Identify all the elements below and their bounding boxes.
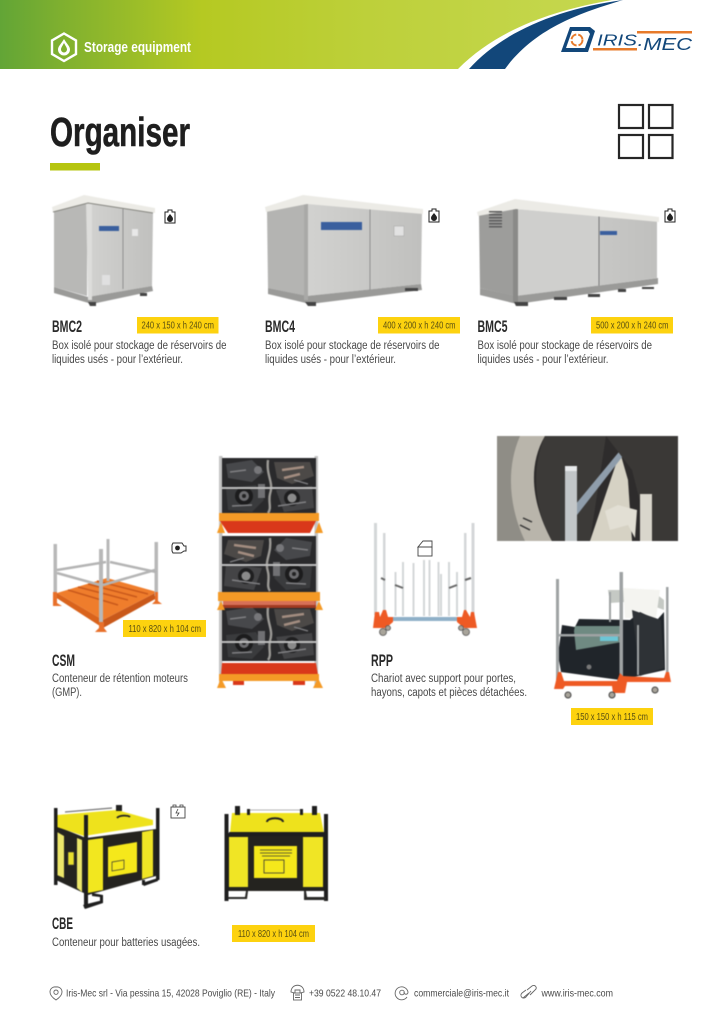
RPP empty trolley photo <box>373 523 477 636</box>
phone: +39 0522 48.10.47 <box>309 988 381 1000</box>
title: Organiser <box>50 109 190 155</box>
RPP name: RPP <box>371 652 393 670</box>
BMC4 size tag: 400 x 200 x h 240 cm <box>383 320 456 332</box>
RPP description: Chariot avec support pour portes, <box>371 673 516 685</box>
BMC4 description: Box isolé pour stockage de réservoirs de <box>265 340 440 352</box>
swoosh <box>469 0 623 69</box>
product: BMC4 <box>265 195 460 366</box>
BMC4 description: liquides usés - pour l’extérieur. <box>265 354 396 366</box>
product: CBE <box>52 805 328 949</box>
header banner <box>0 0 623 69</box>
header icon: hexagon drop <box>52 34 76 61</box>
BMC2 size tag: 240 x 150 x h 240 cm <box>142 320 214 332</box>
CSM description: (GMP). <box>52 687 82 699</box>
BMC5 photo <box>477 199 659 306</box>
icon: at sign <box>395 987 408 1000</box>
CBE angled container photo <box>54 805 160 909</box>
icon: battery <box>171 805 185 818</box>
product: CSM <box>52 456 323 699</box>
logo: ·MEC <box>636 34 692 54</box>
icon: oil canister <box>165 210 175 223</box>
RPP size tag: 150 x 150 x h 115 cm <box>576 712 648 723</box>
footer <box>50 985 613 1000</box>
CSM size tag <box>123 620 206 637</box>
icon: location pin <box>50 987 62 1000</box>
product: BMC5 <box>477 199 675 366</box>
icon: oil canister <box>665 209 675 222</box>
CSM empty pallet photo <box>53 539 162 632</box>
icon: car door <box>418 541 432 556</box>
BMC5 size tag <box>591 317 673 334</box>
website: www.iris-mec.com <box>541 988 613 1000</box>
CSM description: Conteneur de rétention moteurs <box>52 673 188 685</box>
BMC4 photo <box>265 195 423 306</box>
icon: oil canister <box>429 209 439 222</box>
RPP loaded trolley photo <box>554 572 671 698</box>
header label: Storage equipment <box>84 39 191 56</box>
BMC2 photo <box>52 195 155 306</box>
logo: IRIS <box>597 32 638 50</box>
product: BMC2 <box>52 195 226 366</box>
icon: four-square grid <box>619 105 672 158</box>
BMC2 description: liquides usés - pour l’extérieur. <box>52 354 183 366</box>
icon: engine <box>172 543 186 553</box>
BMC2 name: BMC2 <box>52 318 82 336</box>
RPP size tag <box>571 708 653 725</box>
BMC5 size tag: 500 x 200 x h 240 cm <box>596 320 668 332</box>
CSM name: CSM <box>52 652 75 670</box>
CBE front container photo <box>224 806 328 901</box>
CBE description: Conteneur pour batteries usagées. <box>52 937 200 949</box>
CSM size tag: 110 x 820 x h 104 cm <box>128 624 201 635</box>
BMC5 description: Box isolé pour stockage de réservoirs de <box>478 340 652 352</box>
icon: telephone <box>291 985 304 1000</box>
icon: chain link <box>521 985 536 998</box>
RPP description: hayons, capots et pièces détachées. <box>371 687 527 699</box>
RPP door close-up photo <box>497 436 678 541</box>
CSM stacked engines photo <box>217 456 323 688</box>
BMC2 description: Box isolé pour stockage de réservoirs de <box>52 340 226 352</box>
BMC4 name: BMC4 <box>265 318 296 336</box>
address: Iris-Mec srl - Via pessina 15, 42028 Poviglio (RE) - Italy <box>66 988 276 1000</box>
CBE size tag: 110 x 820 x h 104 cm <box>238 929 309 940</box>
BMC4 size tag <box>378 317 460 334</box>
BMC5 description: liquides usés - pour l’extérieur. <box>478 354 608 366</box>
CBE name: CBE <box>52 915 73 933</box>
title underline <box>50 163 100 170</box>
email: commerciale@iris-mec.it <box>414 988 509 1000</box>
BMC5 name: BMC5 <box>478 318 508 336</box>
CBE size tag <box>232 925 315 942</box>
logo <box>561 27 692 54</box>
product: RPP <box>371 436 678 725</box>
BMC2 size tag <box>137 317 218 334</box>
